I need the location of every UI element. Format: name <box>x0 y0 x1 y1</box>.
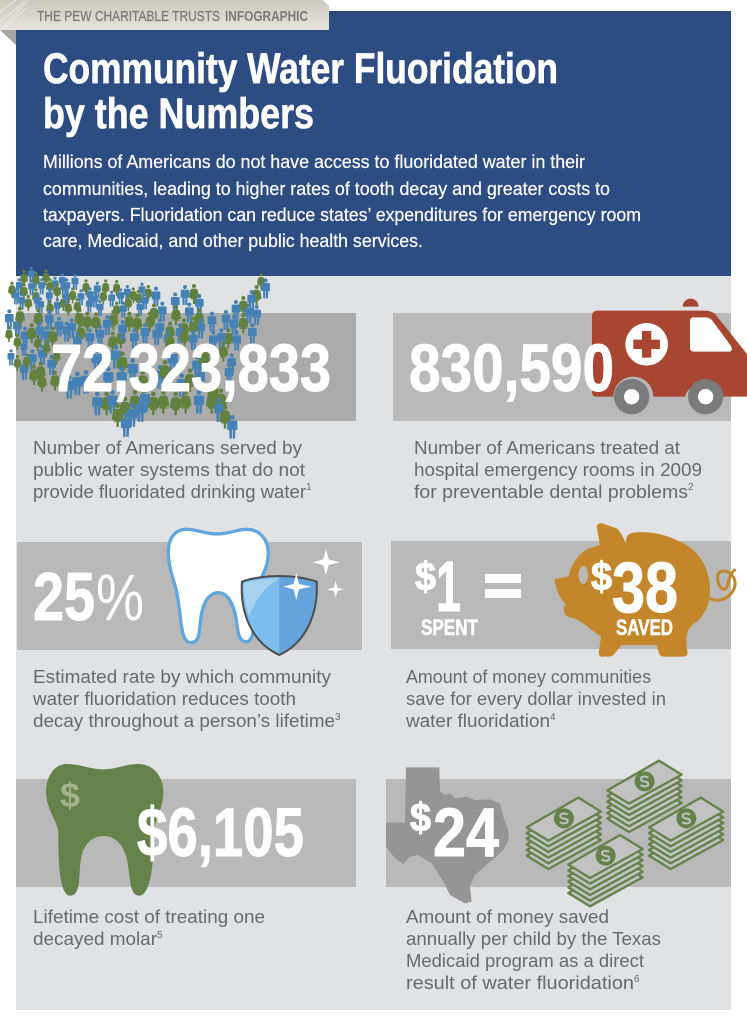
number: $38 saved: SAVED <box>616 615 673 640</box>
description <box>414 438 702 502</box>
description: result of water fluoridation <box>406 973 634 993</box>
panel: stat 72,323,833 <box>5 267 356 502</box>
icon: Texas map <box>386 767 508 903</box>
panel: stat 830,590 <box>393 299 747 502</box>
description: decay throughout a person’s lifetime <box>33 711 335 731</box>
number: $1 spent: SPENT <box>421 615 478 640</box>
description: water fluoridation <box>405 711 550 731</box>
number: $6,105: $6,105 <box>137 794 304 871</box>
number: 830,590: 830,590 <box>409 331 614 406</box>
description: 6 <box>634 974 640 985</box>
description: Number of Americans treated at <box>414 438 680 458</box>
number: $24 <box>410 794 499 871</box>
number: 72,323,833: 72,323,833 <box>51 331 331 406</box>
description: Number of Americans served by <box>33 438 303 458</box>
panel: stat $6,105 <box>16 764 356 949</box>
icon: stacks of money <box>527 761 723 906</box>
number: $38 saved: $ <box>591 555 612 599</box>
icon: tooth with shield <box>168 529 344 655</box>
description: annually per child by the Texas <box>406 929 661 949</box>
number: 25%: 25 <box>33 559 95 635</box>
intro text: communities, leading to higher rates of tooth decay and greater costs to <box>43 178 610 199</box>
icon: green molar with dollar sign <box>46 764 163 896</box>
number: $38 saved: 38 <box>612 549 678 628</box>
description <box>33 907 265 949</box>
description: decayed molar <box>33 929 157 949</box>
description: 2 <box>688 482 694 493</box>
description: public water systems that do not <box>33 460 305 480</box>
description: Medicaid program as a direct <box>406 951 644 971</box>
ribbon banner: INFOGRAPHIC <box>225 8 308 25</box>
title: by the Numbers <box>43 90 314 138</box>
intro text: care, Medicaid, and other public health services. <box>43 230 423 251</box>
description: 1 <box>306 482 312 493</box>
number: $1 spent: 1 <box>436 548 461 627</box>
panel: stat 25% <box>17 529 362 731</box>
number: $1 spent <box>415 548 478 640</box>
intro text <box>43 151 641 251</box>
panel: gray content background <box>16 276 731 1010</box>
description: 3 <box>335 712 341 723</box>
icon: map of United States made of people <box>5 267 270 439</box>
description: hospital emergency rooms in 2009 <box>414 460 702 480</box>
title <box>43 45 558 138</box>
title: Community Water Fluoridation <box>43 45 558 93</box>
intro text: Millions of Americans do not have access to fluoridated water in their <box>43 151 585 172</box>
ribbon banner: THE PEW CHARITABLE TRUSTS <box>37 8 220 25</box>
description <box>405 667 666 731</box>
panel: stat $24 <box>386 761 731 993</box>
description: Amount of money saved <box>406 907 609 927</box>
description: save for every dollar invested in <box>406 689 666 709</box>
description: 5 <box>157 930 163 941</box>
description <box>406 907 661 993</box>
number: $1 spent: $ <box>415 555 436 599</box>
description: water fluoridation reduces tooth <box>32 689 296 709</box>
number: $24: $ <box>410 796 431 840</box>
intro text: taxpayers. Fluoridation can reduce states’ expenditures for emergency room <box>43 204 641 225</box>
header panel <box>16 11 731 276</box>
panel: stat $1 = $38 <box>391 523 736 731</box>
description <box>33 438 312 502</box>
description: provide fluoridated drinking water <box>33 482 306 502</box>
description: 4 <box>550 712 556 723</box>
icon: green molar with dollar sign: $ <box>60 777 80 815</box>
description: Amount of money communities <box>406 667 651 687</box>
description: Lifetime cost of treating one <box>33 907 265 927</box>
icon: ambulance <box>592 299 747 414</box>
number: 25%: % <box>96 560 144 634</box>
description: Estimated rate by which community <box>33 667 332 687</box>
description <box>32 667 341 731</box>
description: for preventable dental problems <box>414 482 688 502</box>
number: $38 saved <box>591 549 678 640</box>
icon: piggy bank <box>554 523 736 657</box>
ribbon banner <box>0 0 329 45</box>
number: $24: 24 <box>433 794 499 871</box>
number: 25% <box>33 559 144 635</box>
equals sign <box>485 574 521 598</box>
